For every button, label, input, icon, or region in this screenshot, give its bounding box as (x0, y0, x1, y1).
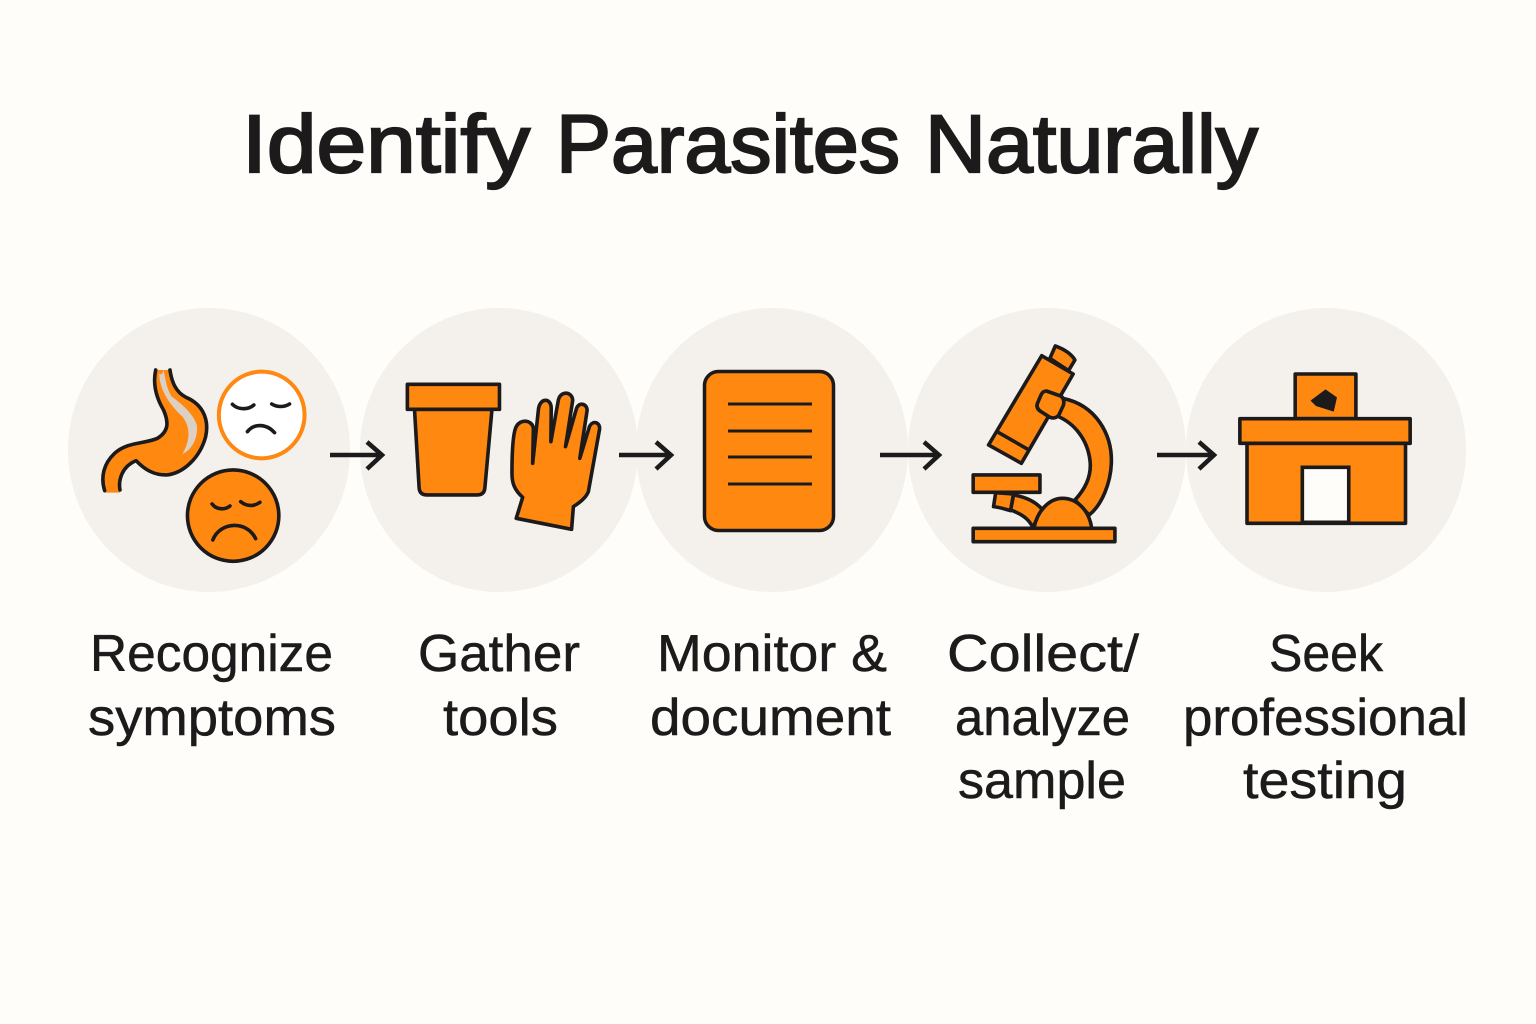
circle background 2 (360, 308, 638, 592)
icon: stomach (103, 370, 207, 493)
building roof (1240, 419, 1410, 443)
title: Naturally (925, 99, 1258, 190)
microscope eyepiece (1050, 346, 1075, 371)
building top box (1295, 374, 1356, 419)
microscope stage (973, 475, 1040, 492)
circle background 1 (68, 308, 350, 592)
microscope dome (1034, 498, 1092, 528)
title: Identify (242, 99, 530, 190)
icon: laboratory building (1240, 374, 1410, 523)
label: monitor and document: Monitor & (657, 625, 887, 683)
step 3: monitor and document (636, 308, 908, 747)
microscope knob (1037, 391, 1064, 418)
label: seek professional testing: testing (1243, 752, 1407, 810)
label: collect and analyze sample: analyze (955, 689, 1130, 747)
label: gather tools: Gather (418, 625, 580, 683)
icon: stomach and sad faces (103, 370, 305, 561)
label: collect and analyze sample (947, 625, 1140, 810)
microscope lamp (994, 493, 1014, 511)
arrow 2 (619, 442, 671, 469)
icon: cup and glove (407, 384, 600, 529)
circle background 3 (636, 308, 908, 592)
label: recognize symptoms (88, 625, 336, 747)
step 5: seek professional testing (1183, 308, 1468, 810)
icon: sample cup (407, 384, 499, 495)
icon: glove (512, 393, 600, 529)
sample blob (1311, 389, 1337, 412)
microscope tube (989, 356, 1073, 463)
circle background 5 (1186, 308, 1466, 592)
label: seek professional testing: Seek (1269, 625, 1384, 683)
label: collect and analyze sample: Collect/ (947, 625, 1140, 683)
building body (1247, 443, 1406, 523)
label: gather tools: tools (443, 689, 558, 747)
title: Parasites (556, 99, 900, 190)
circle background 4 (908, 308, 1186, 592)
step 1: recognize symptoms (68, 308, 350, 747)
arrow 3 (880, 442, 939, 469)
icon: document (704, 372, 834, 530)
icon: white sad face (219, 372, 305, 458)
label: monitor and document: document (650, 689, 892, 747)
label: seek professional testing (1183, 625, 1468, 810)
label: monitor and document (650, 625, 892, 747)
label: collect and analyze sample: sample (958, 752, 1126, 810)
icon: orange sad face (187, 470, 279, 561)
microscope arm (1057, 398, 1111, 515)
step 2: gather tools (360, 308, 638, 747)
title (242, 99, 1258, 190)
label: recognize symptoms: symptoms (88, 689, 336, 747)
arrow 1 (330, 442, 382, 469)
microscope base (973, 528, 1115, 542)
building door (1302, 467, 1349, 522)
label: seek professional testing: professional (1183, 689, 1468, 747)
label: recognize symptoms: Recognize (90, 625, 333, 683)
label: gather tools (418, 625, 580, 747)
icon: microscope (973, 346, 1115, 542)
step 4: collect and analyze sample (908, 308, 1186, 810)
arrow 4 (1157, 442, 1214, 469)
